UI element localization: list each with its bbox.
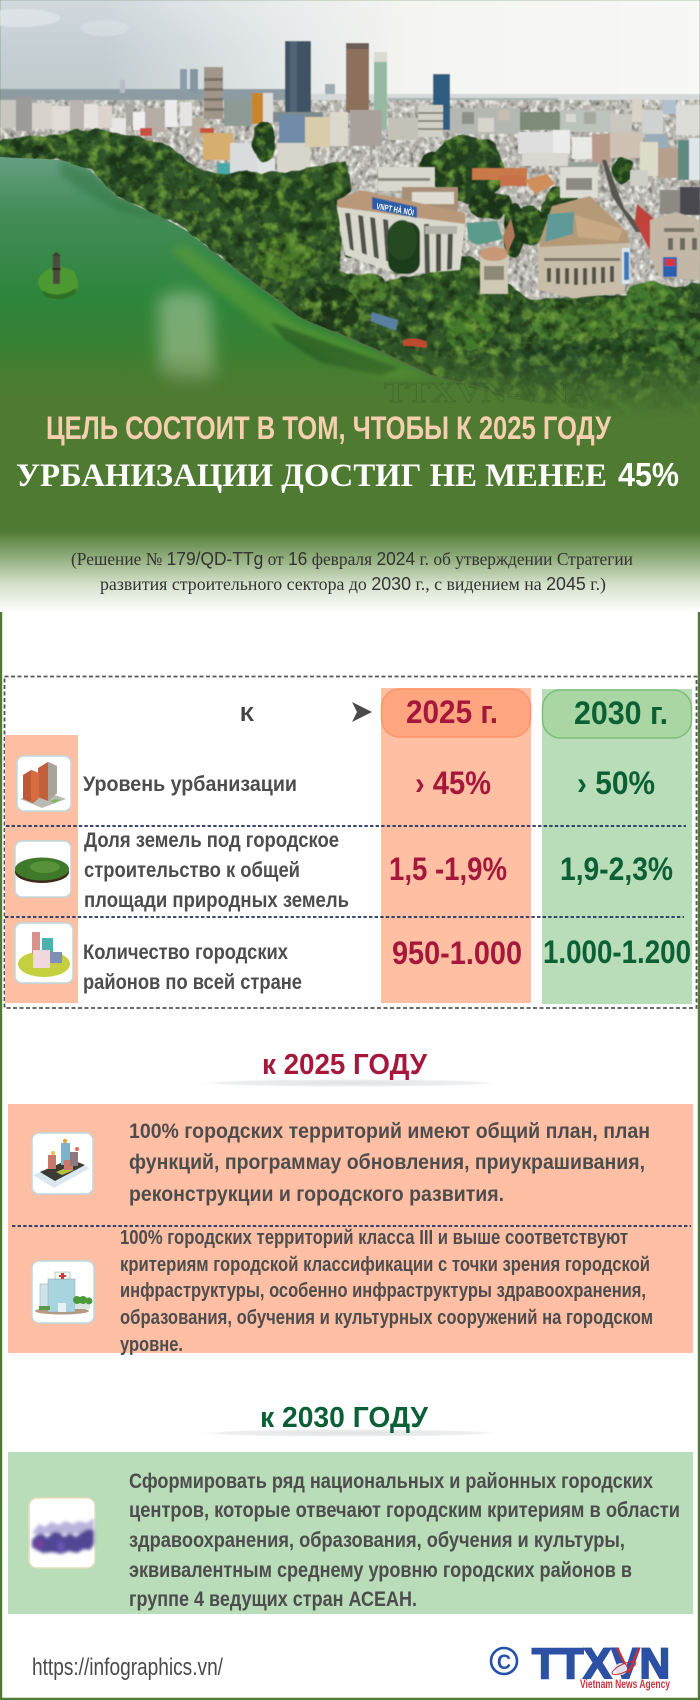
text: goal: здравоохранения, образования, обучения и культуры,: [129, 1528, 625, 1552]
heading: by 2025: [191, 1049, 509, 1087]
column: 2030: [542, 689, 692, 1004]
source note: [71, 549, 633, 595]
band fade to white: [0, 530, 700, 613]
value 2025: › 45%: [415, 765, 491, 801]
source note: (Решение № 179/QD-TTg от 16 февраля 2024 г. об утверждении Стратегии: [71, 549, 633, 570]
green title band: [0, 418, 700, 531]
heading: by 2030: к 2030 ГОДУ: [260, 1402, 429, 1434]
hero photo: Hanoi skyline and lake: [0, 0, 700, 425]
header pill: 2030: [542, 690, 692, 738]
text: goal 1: 100% городских территорий имеют общий план, план: [129, 1119, 650, 1143]
row 1: urbanization rate: [17, 756, 655, 811]
label: Доля земель под городское: [84, 828, 339, 852]
title line 2: 45%: [618, 456, 679, 493]
panel: 2025 goals: [8, 1104, 693, 1356]
icon: city block on lawn: [15, 923, 73, 983]
island with turtle tower: [38, 252, 78, 300]
text: goal: группе 4 ведущих стран АСЕАН.: [129, 1587, 417, 1611]
page frame: [1, 612, 699, 1699]
panel: 2030 goals: [8, 1452, 693, 1614]
icon: apartment towers: [17, 756, 71, 811]
value 2030: 1,9-2,3%: [560, 851, 673, 887]
buildings in the tree belt: [337, 153, 700, 348]
label: [83, 940, 302, 994]
icon: plot of grass: [15, 841, 71, 897]
icon: hospital: [32, 1261, 94, 1323]
row 2: land share: [15, 828, 673, 912]
panel: targets table: [4, 676, 696, 1008]
text: goal 1: [129, 1119, 650, 1206]
header pill: 2025: [382, 689, 530, 737]
label: Уровень урбанизации: [83, 772, 297, 796]
footer url: https://infographics.vn/: [32, 1654, 223, 1681]
lake: [0, 157, 600, 412]
icon: smart city on tablet: [32, 1133, 93, 1194]
text: goal: [129, 1469, 680, 1611]
text: goal 1: реконструкции и городского развития.: [129, 1182, 504, 1206]
label: районов по всей стране: [83, 970, 302, 994]
icon column background: [5, 735, 78, 1003]
column: 2025: [381, 688, 531, 1003]
watermark: TTXVN-VNA: [384, 377, 594, 409]
text: goal 2: уровне.: [120, 1334, 183, 1356]
copyright mark: [491, 1648, 517, 1674]
tree mass along the lake shore: [0, 121, 700, 425]
sign: VNPT Ha Noi: VNPT HÀ NỘI: [376, 200, 415, 218]
label: [84, 828, 349, 912]
value 2025: 1,5 -1,9%: [389, 851, 507, 887]
value 2030: › 50%: [577, 765, 655, 801]
label: Количество городских: [83, 940, 288, 964]
label: строительство к общей: [84, 858, 300, 882]
globe mark: [611, 1648, 639, 1677]
heading: by 2030: [191, 1402, 509, 1437]
logo: TTXVN: TTXVN: [532, 1640, 670, 1688]
header label: К: [240, 704, 255, 726]
text: goal 1: функций, программау обновления, приукрашивания,: [129, 1150, 645, 1174]
copyright mark: C: [497, 1651, 511, 1674]
row 3: urban districts: [15, 923, 691, 994]
text: goal 2: [120, 1227, 653, 1356]
heading: by 2025: к 2025 ГОДУ: [262, 1049, 428, 1081]
arrow: [352, 702, 372, 722]
label: площади природных земель: [84, 888, 349, 912]
icon: purple skyline: [29, 1498, 95, 1568]
source note: развития строительного сектора до 2030 г., с видением на 2045 г.): [100, 574, 606, 595]
title line 2: УРБАНИЗАЦИИ ДОСТИГ НЕ МЕНЕЕ: [16, 458, 607, 494]
value 2025: 950-1.000: [392, 935, 522, 971]
header pill: 2030: 2030 г.: [574, 695, 668, 731]
header pill: 2025: 2025 г.: [406, 694, 498, 730]
